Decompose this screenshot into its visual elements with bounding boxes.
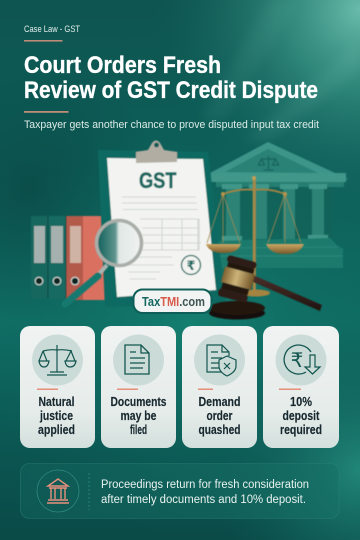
clipboard clip	[136, 140, 177, 163]
logo badge	[134, 290, 212, 313]
icon: document with shield	[207, 345, 236, 376]
icon: courthouse	[37, 470, 79, 512]
rupee stamp	[182, 256, 200, 274]
card label: deposit	[282, 409, 320, 423]
card label: Documents	[110, 395, 167, 409]
card label: quashed	[198, 423, 240, 437]
illustration: binders	[31, 216, 105, 300]
subtitle: Taxpayer gets another chance to prove disputed input tax credit	[24, 119, 319, 131]
card: documents	[101, 326, 176, 448]
title: Review of GST Credit Dispute	[24, 77, 318, 104]
eyebrow rule	[24, 40, 62, 42]
card label: Natural	[38, 395, 74, 409]
card label: required	[280, 423, 322, 437]
logo badge: TaxTMI.com	[142, 294, 205, 309]
card label	[38, 395, 75, 437]
icon: scales	[39, 345, 76, 375]
form lines and table	[122, 197, 201, 279]
illustration: courthouse	[210, 142, 348, 268]
card label	[280, 395, 322, 437]
card label: filed	[130, 423, 147, 437]
card label: justice	[39, 409, 73, 423]
card: demand order	[182, 326, 257, 448]
eyebrow label: Case Law - GST	[24, 24, 80, 35]
card label: 10%	[290, 395, 312, 409]
card label	[110, 395, 167, 437]
GST heading: GST	[139, 168, 177, 193]
card label: Demand	[198, 395, 240, 409]
card: natural justice	[20, 326, 95, 448]
summary text: after timely documents and 10% deposit.	[101, 494, 306, 506]
summary text: Proceedings return for fresh consideration	[101, 479, 309, 491]
illustration: clipboard	[98, 140, 226, 307]
card label	[198, 395, 240, 437]
summary text	[101, 479, 309, 506]
card label: may be	[120, 409, 157, 423]
rupee stamp: ₹	[186, 259, 196, 274]
card: deposit	[263, 326, 339, 448]
card label: applied	[38, 423, 75, 437]
gavel block	[209, 301, 265, 320]
icon: document	[125, 345, 149, 374]
panel: summary	[20, 464, 339, 518]
illustration: magnifying glass	[65, 220, 142, 304]
illustration: scales of justice	[206, 176, 304, 296]
title: Court Orders Fresh	[24, 52, 221, 79]
title	[24, 52, 318, 104]
title rule	[24, 111, 68, 113]
card label: order	[206, 409, 233, 423]
illustration: gavel	[209, 255, 322, 320]
icon: rupee with down arrow: ₹	[291, 348, 303, 372]
